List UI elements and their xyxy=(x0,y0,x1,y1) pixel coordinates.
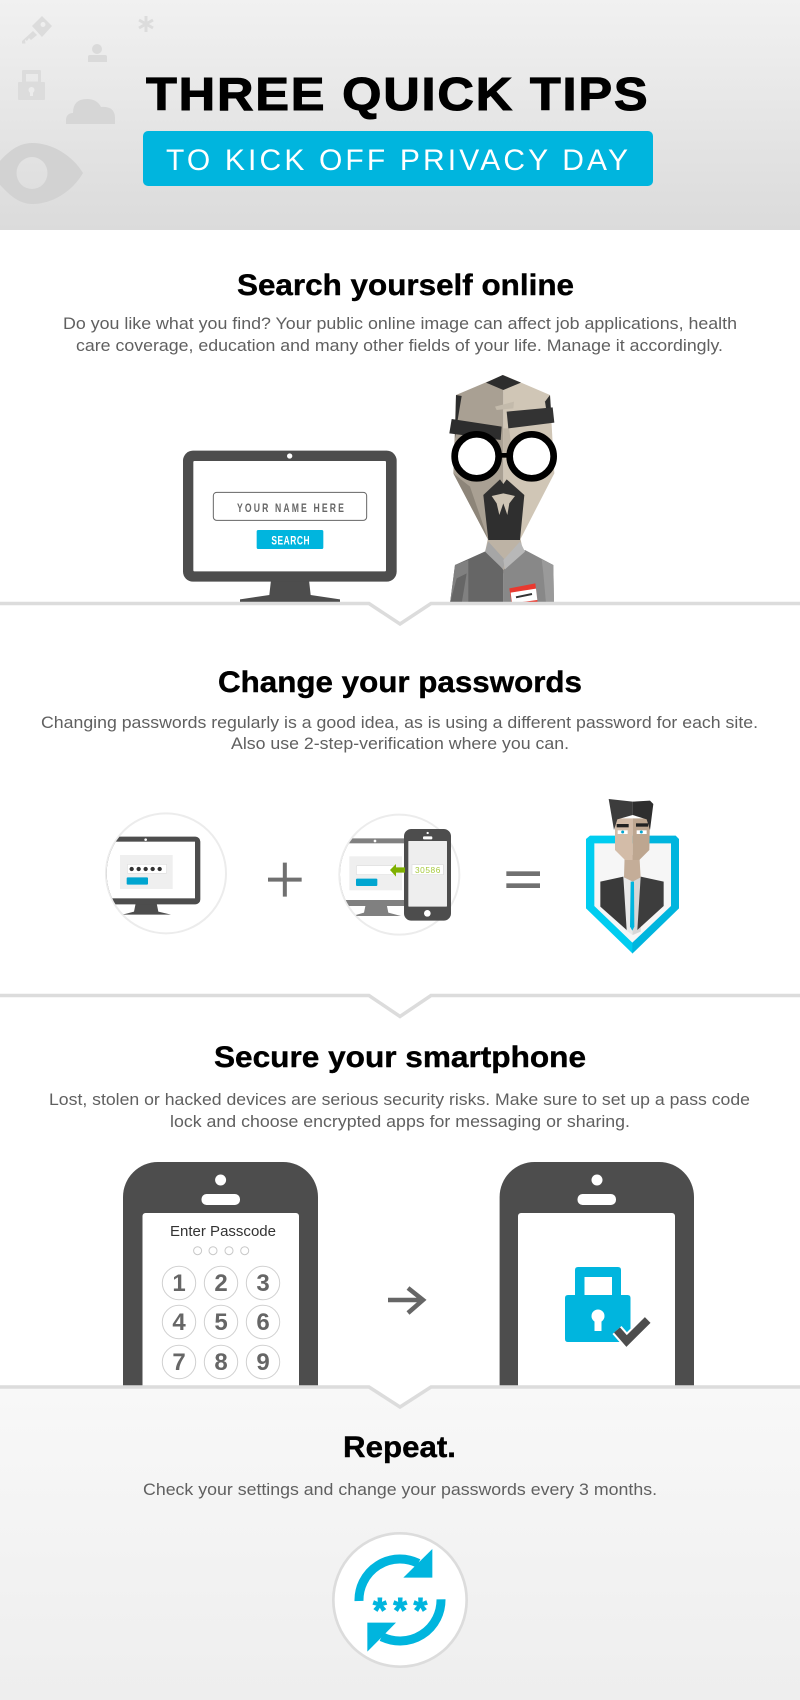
keypad: 4 xyxy=(172,1309,186,1336)
heading: Search yourself online xyxy=(237,269,574,302)
icon: cloud xyxy=(66,99,115,124)
divider: section two xyxy=(0,996,800,1016)
keypad: 2 xyxy=(214,1270,228,1297)
diagram: computer password xyxy=(90,813,226,933)
keypad: 6 xyxy=(256,1309,270,1336)
keypad: 9 xyxy=(256,1349,270,1376)
icon: repeat password xyxy=(333,1533,467,1667)
search button xyxy=(257,530,323,549)
panel: repeat xyxy=(0,1387,800,1700)
keypad: 5 xyxy=(214,1309,228,1336)
text block: Lost, stolen or hacked devices are serious security risks. Make sure to set up a pass code xyxy=(49,1090,750,1109)
illustration: man in shield xyxy=(586,799,679,954)
text block: Also use 2-step-verification where you can. xyxy=(231,734,569,753)
search input xyxy=(213,492,367,520)
panel: secure your smartphone xyxy=(49,1041,750,1403)
keypad xyxy=(162,1266,280,1379)
text block: Do you like what you find? Your public online image can affect job applications, health xyxy=(63,314,737,333)
panel: search yourself online xyxy=(63,269,737,603)
text block: Check your settings and change your passwords every 3 months. xyxy=(143,1480,657,1499)
keypad: 1 xyxy=(172,1270,186,1297)
illustration: monitor xyxy=(183,451,397,603)
text block: Changing passwords regularly is a good idea, as is using a different password for each site. xyxy=(41,713,758,732)
name tag xyxy=(509,583,538,603)
heading: Secure your smartphone xyxy=(214,1041,586,1074)
icon: key xyxy=(22,16,52,44)
diagram: two-step verification xyxy=(323,815,459,935)
keypad: 7 xyxy=(172,1349,186,1376)
keypad: 3 xyxy=(256,1270,270,1297)
icon: repeat password: *** xyxy=(373,1591,428,1630)
panel: header xyxy=(0,0,800,230)
subtitle banner xyxy=(143,131,653,186)
text block xyxy=(41,713,758,753)
search input: YOUR NAME HERE xyxy=(237,502,344,515)
icon: padlock xyxy=(18,70,45,100)
passcode label: Enter Passcode xyxy=(170,1224,276,1240)
illustration: man with glasses xyxy=(449,375,554,603)
panel: change your passwords xyxy=(41,666,758,954)
text block xyxy=(63,314,737,355)
illustration: phone with passcode xyxy=(123,1162,318,1403)
text block xyxy=(49,1090,750,1131)
title: THREE QUICK TIPS xyxy=(146,69,648,120)
arrow: code transfer xyxy=(390,864,405,877)
keypad: 8 xyxy=(214,1349,228,1376)
search button: SEARCH xyxy=(271,535,310,548)
icon: asterisk xyxy=(139,16,153,32)
passcode dots xyxy=(194,1247,249,1255)
arrow xyxy=(388,1288,423,1313)
divider: section one xyxy=(0,604,800,624)
text block: care coverage, education and many other fields of your life. Manage it accordingly. xyxy=(76,336,723,355)
icon: lock xyxy=(565,1267,648,1342)
phone: 30586 xyxy=(415,865,441,875)
illustration: phone with lock xyxy=(500,1162,694,1403)
icon: person xyxy=(88,44,107,62)
subtitle banner: TO KICK OFF PRIVACY DAY xyxy=(166,144,628,177)
heading: Change your passwords xyxy=(218,666,582,699)
icon: plus xyxy=(268,863,302,897)
text block: lock and choose encrypted apps for messaging or sharing. xyxy=(170,1112,630,1131)
heading: Repeat. xyxy=(343,1431,456,1464)
icon: eye xyxy=(0,143,83,204)
icon: equals sign xyxy=(506,871,540,888)
